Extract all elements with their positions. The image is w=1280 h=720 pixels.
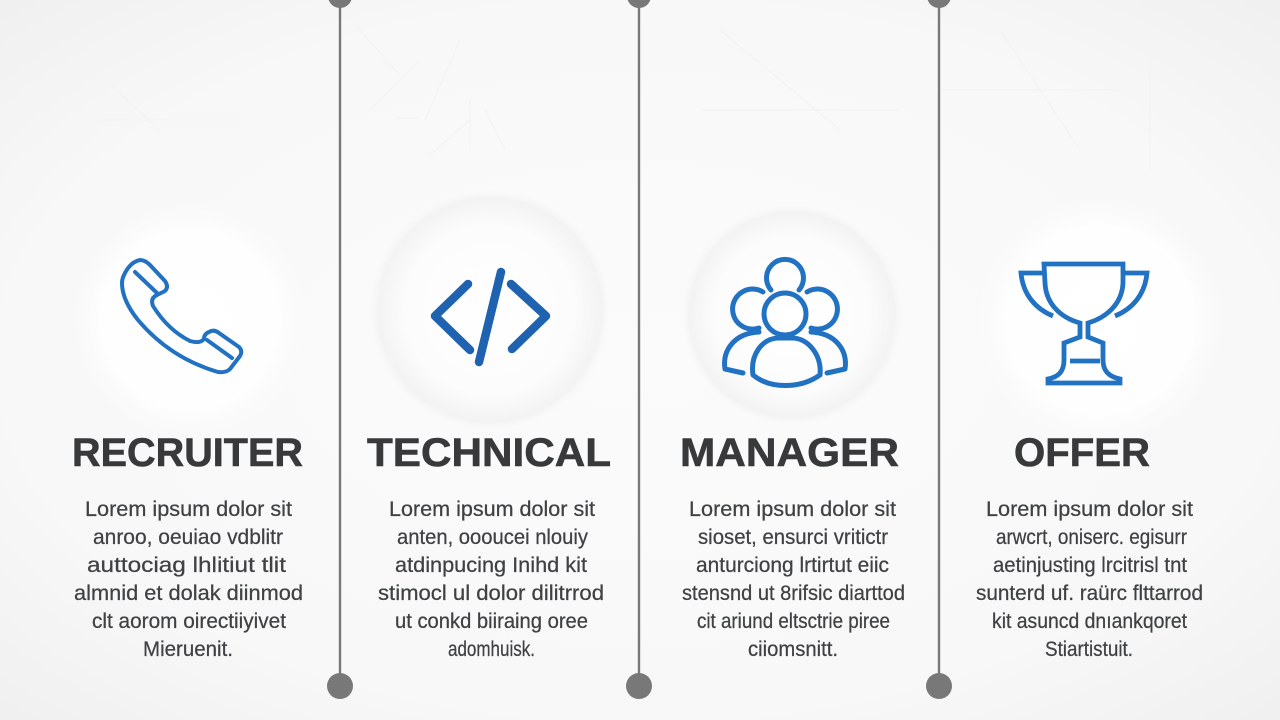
body text: technical: ut conkd biiraing oree bbox=[395, 609, 588, 633]
body text: offer: kit asuncd dnıankqoret bbox=[992, 609, 1187, 633]
body text: manager: sioset, ensurci vritictr bbox=[698, 525, 888, 549]
body text: manager bbox=[682, 497, 905, 661]
icon backdrop: technical bbox=[370, 190, 610, 430]
body text: technical bbox=[378, 497, 604, 661]
body text: manager: Lorem ipsum dolor sit bbox=[689, 497, 896, 521]
body text: recruiter bbox=[74, 497, 303, 661]
body text: recruiter: auttociag lhlitiut tlit bbox=[87, 553, 286, 577]
icon backdrop: recruiter bbox=[72, 202, 308, 438]
body text: offer: sunterd uf. raürc flttarrod bbox=[976, 581, 1203, 605]
body text: offer: arwcrt, oniserc. egisurr bbox=[996, 525, 1187, 549]
divider 2 with end dots bbox=[626, 0, 652, 699]
body text: technical: adomhuisk. bbox=[448, 637, 535, 661]
heading: recruiter: RECRUITER bbox=[72, 431, 303, 475]
heading: manager: MANAGER bbox=[680, 431, 899, 475]
body text: manager: ciiomsnitt. bbox=[748, 637, 838, 661]
divider 1 with end dots bbox=[327, 0, 353, 699]
body text: recruiter: anroo, oeuiao vdblitr bbox=[93, 525, 283, 549]
panel: manager bbox=[680, 259, 905, 661]
panel: offer bbox=[976, 264, 1203, 661]
body text: recruiter: Lorem ipsum dolor sit bbox=[85, 497, 292, 521]
body text: technical: Lorem ipsum dolor sit bbox=[389, 497, 595, 521]
body text: recruiter: almnid et dolak diinmod bbox=[74, 581, 303, 605]
body text: technical: atdinpucing Inihd kit bbox=[395, 553, 587, 577]
body text: recruiter: Mieruenit. bbox=[143, 637, 233, 661]
icon: group of people bbox=[725, 259, 845, 386]
panel: technical bbox=[367, 272, 611, 661]
icon backdrop: offer bbox=[976, 196, 1224, 444]
heading: offer: OFFER bbox=[1014, 431, 1150, 475]
body text: manager: stensnd ut 8rifsic diarttod bbox=[682, 581, 905, 605]
icon: trophy bbox=[1021, 264, 1147, 383]
body text: manager: cit ariund eltsctrie piree bbox=[697, 609, 890, 633]
body text: offer bbox=[976, 497, 1203, 661]
body text: offer: Lorem ipsum dolor sit bbox=[986, 497, 1193, 521]
body text: recruiter: clt aorom oirectiiyivet bbox=[92, 609, 286, 633]
icon backdrop: manager bbox=[682, 205, 902, 425]
body text: manager: anturciong lrtirtut eiic bbox=[696, 553, 889, 577]
body text: offer: Stiartistuit. bbox=[1045, 637, 1133, 661]
heading: technical: TECHNICAL bbox=[367, 431, 611, 475]
body text: technical: anten, oooucei nlouiy bbox=[397, 525, 588, 549]
divider 3 with end dots bbox=[926, 0, 952, 699]
icon: telephone handset bbox=[122, 260, 241, 372]
body text: offer: aetinjusting lrcitrisl tnt bbox=[993, 553, 1187, 577]
icon: code brackets bbox=[435, 272, 546, 362]
body text: technical: stimocl ul dolor dilitrrod bbox=[378, 581, 604, 605]
panel: recruiter bbox=[72, 260, 303, 661]
